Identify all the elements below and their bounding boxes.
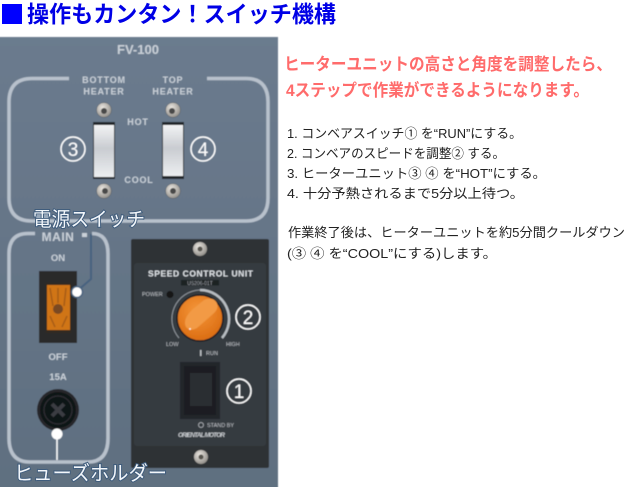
leader: fuse holder [52, 428, 62, 460]
model label: FV-100 [117, 42, 159, 57]
number 3 [61, 137, 85, 161]
heater labels: COOL [124, 175, 154, 185]
number 4 [191, 137, 215, 161]
frame: heater switches [9, 78, 268, 221]
fuse holder [37, 389, 79, 431]
speed knob [172, 290, 229, 341]
main label: MAIN [42, 230, 74, 244]
conveyor switch [180, 362, 220, 419]
number 4: 4 [198, 140, 209, 161]
steps list: 2. コンベアのスピードを調整② する。 [287, 146, 505, 161]
unit title: SPEED CONTROL UNIT [148, 268, 254, 278]
stand-by label: STAND BY [207, 423, 234, 429]
steps list [287, 126, 546, 201]
knob scale labels: LOW [166, 342, 179, 348]
brand: ORIENTAL MOTOR [178, 432, 225, 439]
heater labels: BOTTOM [82, 75, 126, 85]
heading: red lead text [284, 54, 612, 100]
leader: power switch [72, 234, 91, 298]
rocker switch [39, 271, 77, 343]
label: power switch: 電源スイッチ [33, 208, 145, 231]
power indicator [142, 291, 174, 298]
number 1 [227, 379, 251, 403]
heater labels [82, 75, 194, 185]
closing note: 作業終了後は、ヒーターユニットを約5分間クールダウン [288, 225, 625, 240]
stand-by label [198, 422, 234, 429]
steps list: 1. コンベアスイッチ① を“RUN”にする。 [287, 126, 522, 141]
number 3: 3 [68, 140, 78, 161]
number 1: 1 [234, 382, 244, 403]
main label: 15A [49, 372, 67, 383]
knob scale labels: HIGH [226, 342, 240, 348]
main label: OFF [48, 352, 68, 363]
panel: control panel photo [0, 37, 278, 487]
number 2: 2 [243, 308, 253, 329]
closing note [287, 225, 625, 261]
power indicator: POWER [142, 292, 163, 298]
model plate: US206-01T [187, 281, 213, 287]
model plate [181, 280, 219, 287]
number 2 [236, 305, 260, 329]
switch: top heater [162, 122, 184, 179]
knob scale labels: RUN [206, 351, 218, 357]
steps list: 3. ヒーターユニット③ ④ を“HOT”にする。 [287, 166, 546, 181]
heater labels: TOP [163, 75, 183, 85]
heading: red lead text: 4ステップで作業ができるようになります。 [286, 80, 589, 100]
main label: ON [51, 253, 65, 264]
heater labels: HOT [127, 117, 149, 127]
frame: main [9, 234, 108, 462]
label: fuse holder: ヒューズホルダー [14, 462, 167, 485]
screws [96, 102, 180, 198]
main label [42, 230, 87, 383]
speed control unit [131, 239, 269, 468]
unit screws [193, 242, 208, 464]
knob scale labels [166, 342, 240, 357]
title: 操作もカンタン！スイッチ機構 [27, 1, 336, 27]
steps list: 4. 十分予熱されるまで5分以上待つ。 [287, 186, 524, 201]
heater labels: HEATER [152, 86, 194, 96]
heater labels: HEATER [83, 86, 125, 96]
closing note: (③ ④ を“COOL”にする)します。 [287, 246, 497, 261]
switch: bottom heater [93, 122, 115, 179]
